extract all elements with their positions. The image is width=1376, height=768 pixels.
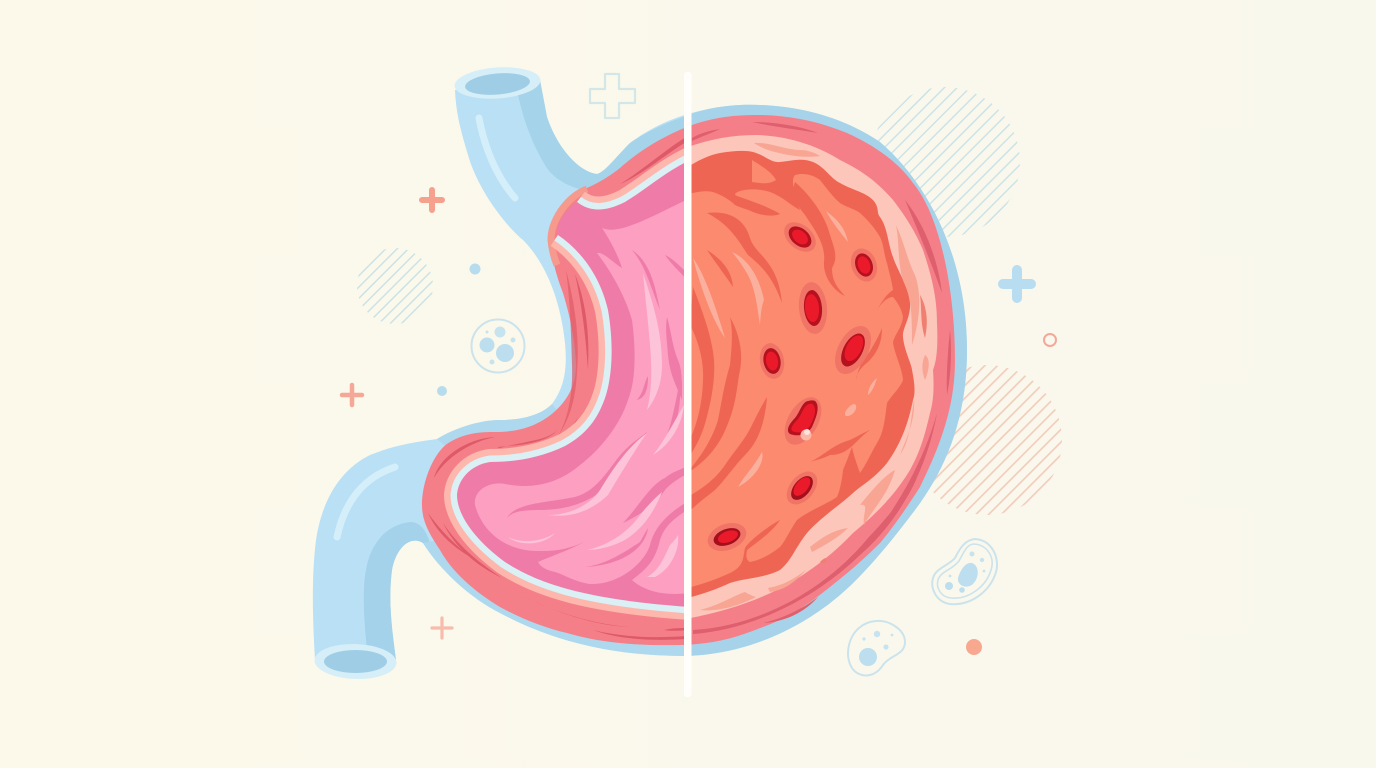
panel: healthy half	[428, 137, 690, 640]
ulcer 6 bleeding	[784, 397, 822, 445]
highlights on healthy mucosa	[508, 273, 684, 577]
ulcer 8	[708, 523, 746, 551]
icon: coral ring	[1044, 334, 1056, 346]
muscle layer	[422, 115, 955, 645]
icon: bacterium double outline	[932, 539, 997, 604]
duodenum opening	[314, 643, 397, 680]
pale highlights on inflamed mucosa	[693, 160, 877, 487]
muscle streaks left	[428, 137, 686, 640]
icon: coral plus left lower	[342, 385, 362, 405]
ulcer 2	[851, 248, 877, 282]
orange rim	[551, 189, 587, 265]
illustration: healthy vs ulcerated stomach	[312, 67, 1062, 697]
light pink folds	[475, 198, 690, 594]
dark folds on healthy mucosa	[507, 250, 690, 567]
icon: outlined plus top	[590, 74, 635, 118]
outer wall right side	[680, 105, 967, 656]
icon: bacterium single outline	[848, 621, 905, 676]
salmon layer	[457, 160, 690, 607]
inflamed folds	[686, 182, 882, 552]
streaks in pale layer	[700, 143, 929, 610]
icon: blue plus right	[1003, 270, 1031, 298]
dark pink mucosa	[457, 160, 690, 607]
hatched circle: left	[357, 248, 433, 324]
icon: round cell	[472, 320, 524, 372]
esophagus and duodenum tubes with stomach outer wall	[313, 80, 967, 660]
salmon inner mucosa	[680, 174, 903, 590]
icon: blue dot lower	[437, 386, 447, 396]
muscle streaks right	[692, 122, 951, 634]
ulcer 7	[786, 472, 818, 504]
ulcer 1	[784, 222, 816, 252]
pale layer	[680, 135, 937, 620]
hatched circle: top right	[870, 87, 1020, 237]
icon: thin coral plus bottom	[432, 618, 452, 638]
esophagus opening	[454, 65, 541, 101]
ulcer 3	[799, 282, 827, 334]
hatched circle: bottom right	[912, 365, 1062, 515]
icon: coral dot	[966, 639, 982, 655]
ulcer 5	[760, 343, 784, 379]
mucosa dark red	[680, 151, 915, 600]
center divider line	[684, 72, 692, 697]
ulcer 4	[835, 326, 871, 374]
panel: inflamed half	[680, 122, 951, 634]
pale blue membrane	[457, 160, 690, 607]
icon: blue dot upper	[470, 264, 480, 274]
icon: coral plus left upper	[422, 190, 442, 210]
